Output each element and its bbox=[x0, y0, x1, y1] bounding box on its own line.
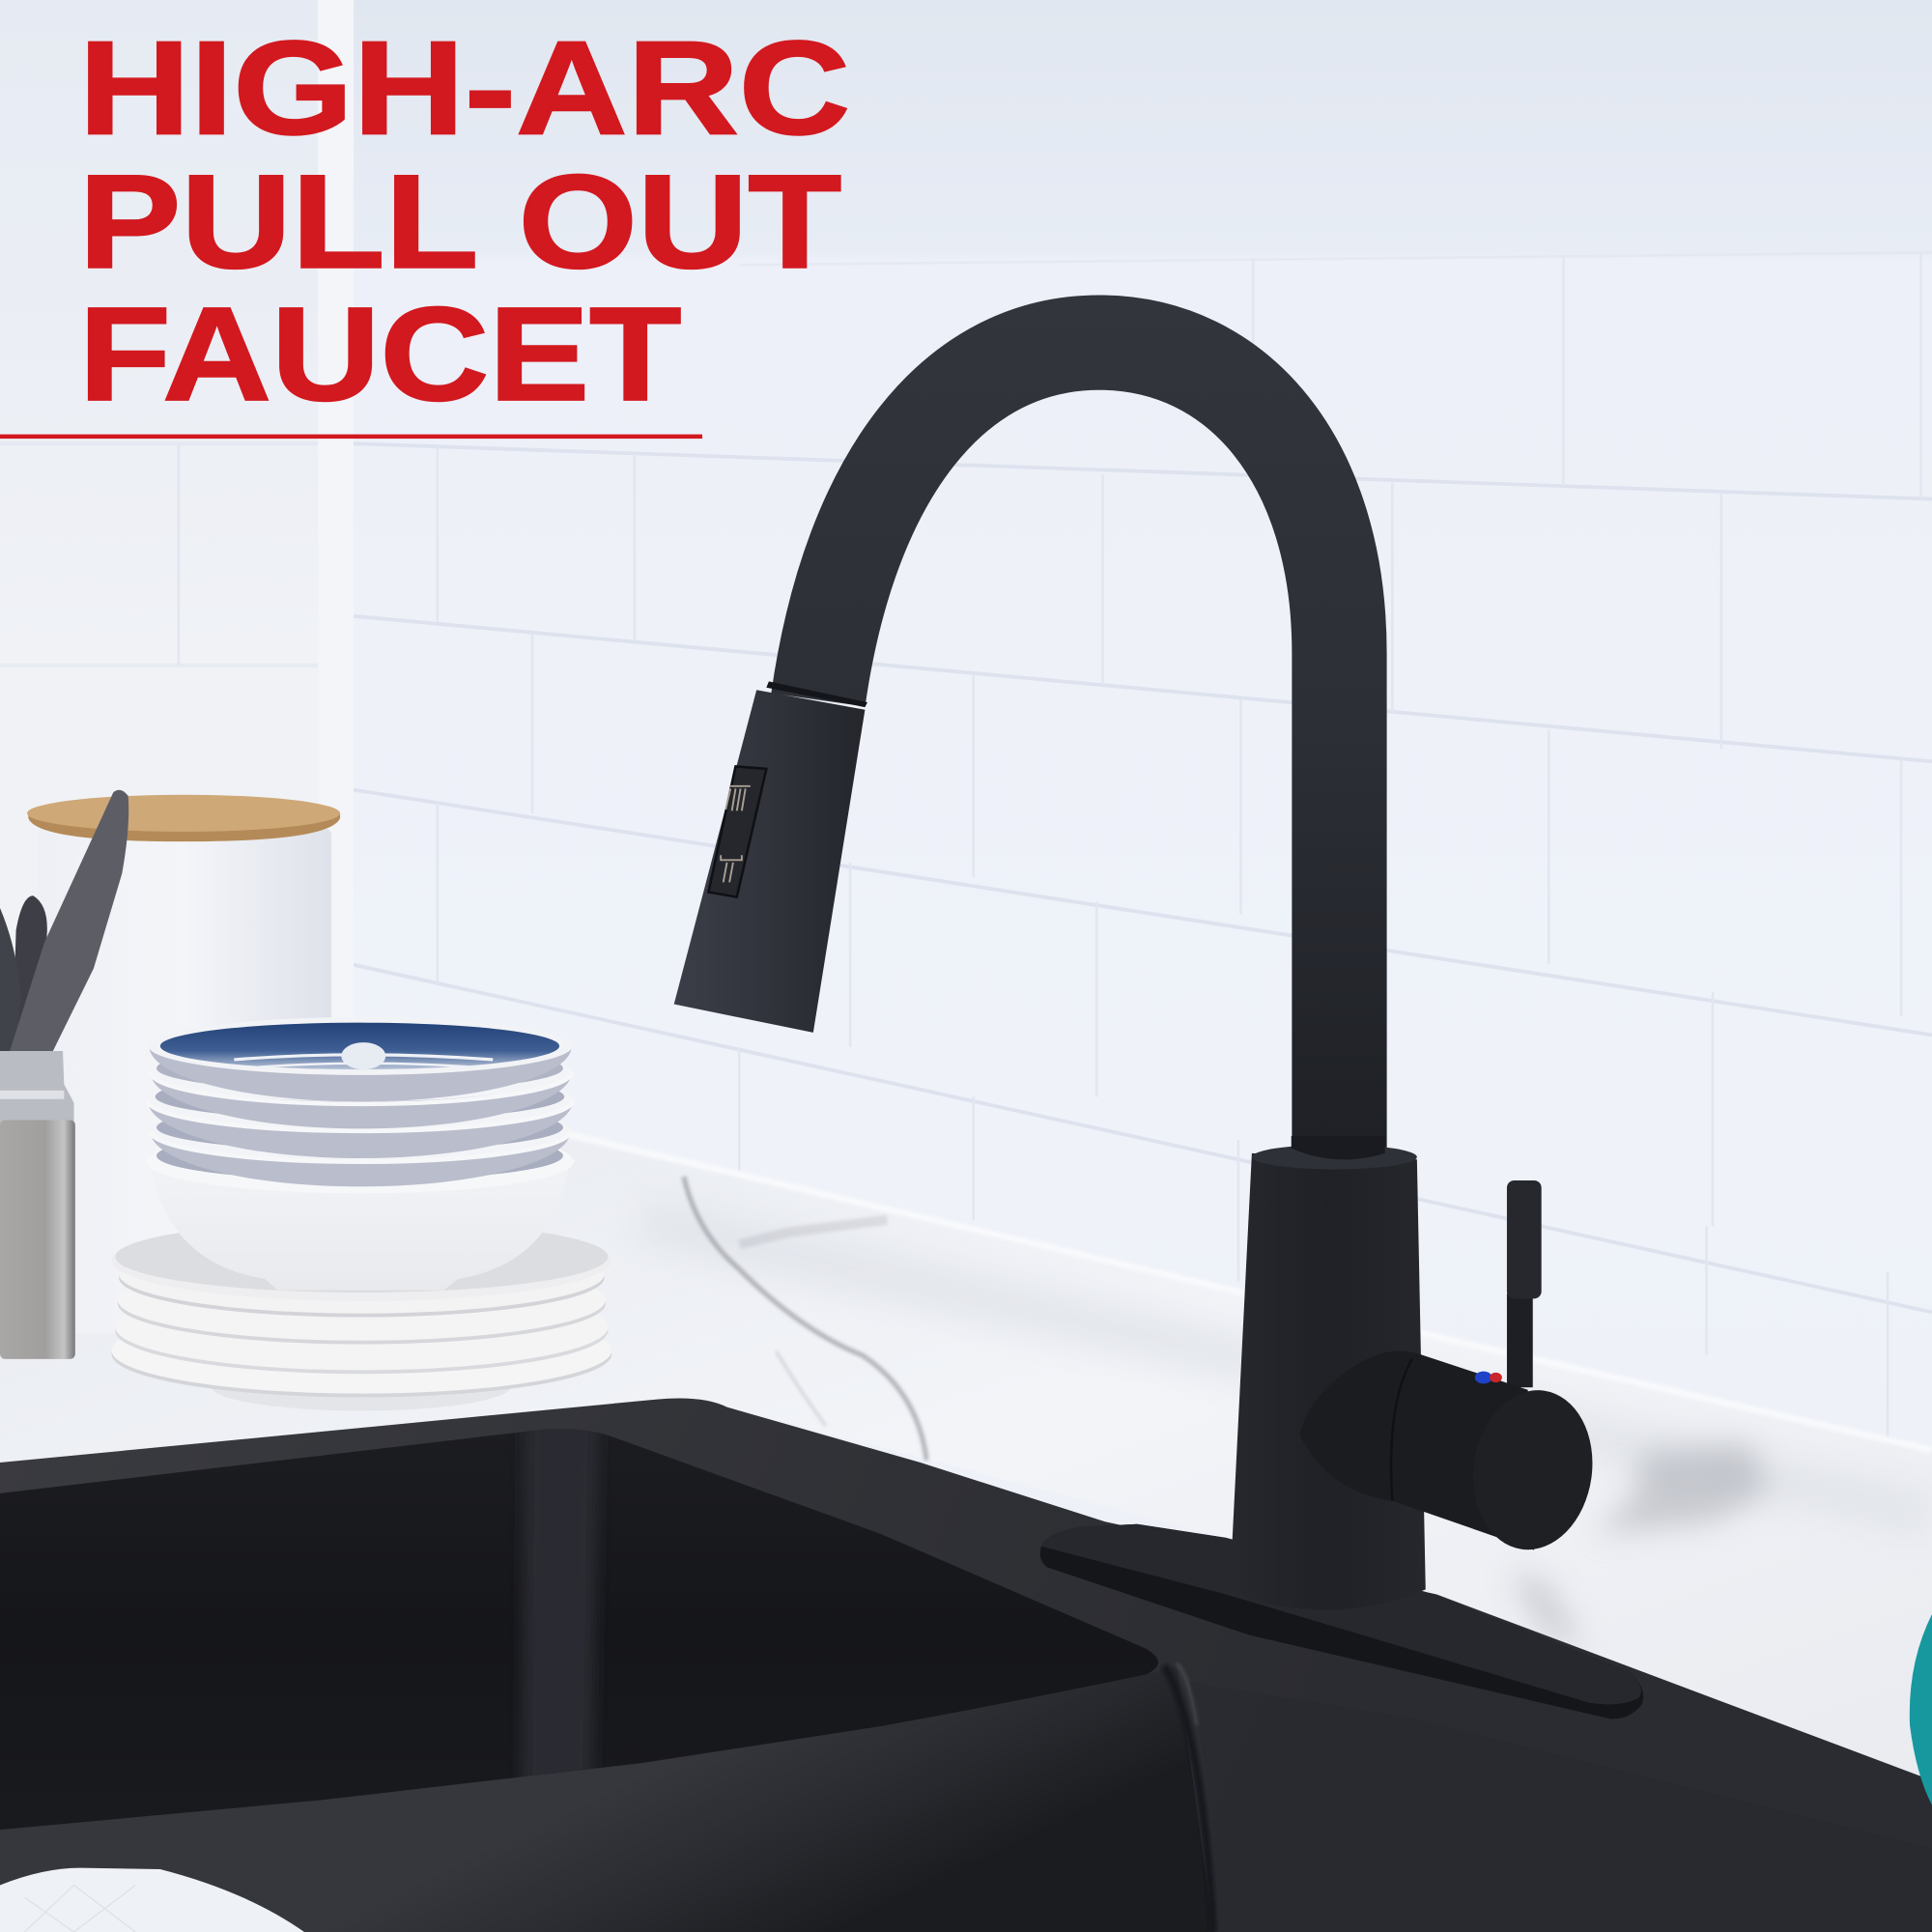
front rim between basin and bottom edge bbox=[0, 1665, 1213, 1932]
marble countertop bbox=[0, 1109, 1932, 1786]
base body bbox=[1230, 1136, 1426, 1609]
black granite sink bbox=[0, 1392, 1932, 1932]
utensils in jar bbox=[0, 790, 128, 1359]
spray head bbox=[674, 681, 867, 1033]
folded towel bbox=[0, 1868, 304, 1932]
basin seam bbox=[1164, 1665, 1213, 1932]
lever rod bbox=[1507, 1180, 1542, 1387]
left basin bbox=[0, 1392, 1158, 1830]
deck plate bbox=[1040, 1524, 1643, 1719]
spray selector button bbox=[708, 766, 766, 897]
gooseneck spout bbox=[818, 343, 1339, 1164]
blue glazed top bowl bbox=[149, 1017, 572, 1101]
faucet bbox=[674, 343, 1643, 1719]
handle cylinder bbox=[1300, 1351, 1603, 1557]
title bbox=[79, 14, 850, 429]
hot and cold indicator bbox=[1475, 1372, 1502, 1383]
title: FAUCET bbox=[79, 280, 681, 429]
title: PULL OUT bbox=[79, 148, 841, 297]
canister with wooden lid bbox=[27, 795, 340, 1333]
title underline bbox=[0, 435, 702, 439]
teal object at right edge bbox=[1910, 1614, 1932, 1805]
lower bowl front rims bbox=[148, 1072, 573, 1186]
stacked plates and bowls bbox=[111, 1017, 611, 1410]
white bowl bbox=[146, 1042, 574, 1290]
title: HIGH-ARC bbox=[79, 14, 850, 162]
